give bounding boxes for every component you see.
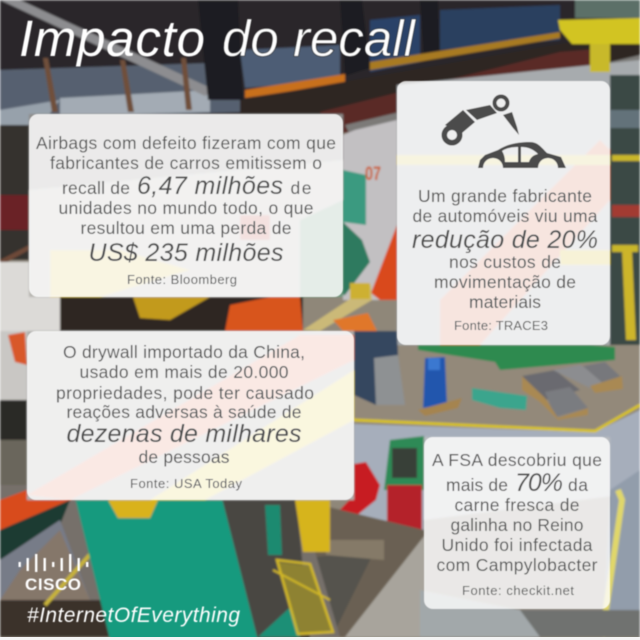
text: FSA description: Unido foi infectada [442, 535, 593, 555]
lower-left [0, 470, 340, 637]
text: airbags description: 6,47 milhões [137, 172, 283, 200]
centre floor and bed [300, 500, 424, 637]
orange machines [60, 297, 303, 331]
yellow crane [558, 18, 640, 44]
panel: drywall [27, 331, 354, 500]
source: checkit.net: Fonte: checkit.net [462, 583, 574, 598]
text: airbags description: recall de [62, 178, 130, 198]
right wall and machinery [397, 60, 640, 345]
source: TRACE3: Fonte: TRACE3 [454, 318, 548, 333]
floor markings [354, 405, 640, 431]
text: FSA description: 70% [515, 469, 563, 497]
text: materials handling: movimentação de [434, 272, 576, 292]
text: airbags description: fabricantes de carros emitissem o [50, 153, 322, 173]
text: materials handling: nos custos de [449, 252, 561, 272]
icon: robot arm [442, 94, 519, 146]
carts [384, 436, 424, 490]
ceiling and back walls [0, 0, 640, 130]
text: FSA description: mais de [446, 475, 508, 495]
panel: automaker [397, 81, 610, 345]
big teal press [75, 498, 258, 640]
text: FSA description: com Campylobacter [436, 555, 598, 575]
logo: Cisco [18, 554, 88, 594]
text: airbags description: resultou em uma perda de [80, 218, 292, 238]
text: materials handling: Um grande fabricante [418, 186, 592, 206]
hashtag: #InternetOfEverything [27, 604, 240, 627]
title: Impacto [19, 10, 205, 67]
logo: Cisco: CISCO [25, 575, 81, 594]
icon: car body [478, 142, 566, 168]
text: drywall description: reações adversas à saúde de [66, 402, 302, 422]
source: Bloomberg: Fonte: Bloomberg [127, 272, 237, 287]
wall with bay number 07 [343, 120, 397, 300]
text: airbags description [36, 133, 336, 267]
text: materials handling: materiais [469, 292, 541, 312]
left wall and railings [0, 125, 29, 260]
text: airbags description: US$ 235 milhões [88, 239, 284, 267]
text: airbags description: de [290, 178, 312, 198]
pallets [522, 370, 580, 400]
text: drywall description: usado em mais de 20.000 [80, 362, 289, 382]
title: do recall [222, 10, 417, 67]
text: FSA description [432, 450, 602, 575]
text: FSA description: A FSA descobriu que [432, 450, 602, 470]
floor with machines [354, 345, 640, 430]
text: FSA description: carne fresca de [454, 495, 580, 515]
left objects under panel 3 [0, 331, 27, 401]
panel: FSA [424, 437, 610, 609]
text: drywall description: O drywall importado da China, [63, 342, 305, 362]
under panel 2 tints [440, 140, 610, 345]
source: USA Today: Fonte: USA Today [130, 476, 242, 491]
text: materials handling: de automóveis viu uma [412, 206, 598, 226]
text: FSA description: galinha no Reino [450, 515, 584, 535]
background: factory floor photograph: 07 [365, 164, 381, 185]
text: drywall description [56, 342, 314, 467]
text: materials handling [412, 186, 598, 312]
text: drywall description: de pessoas [138, 447, 230, 467]
title [19, 10, 417, 67]
light backdrop seen through panel 3 [27, 331, 354, 500]
text: drywall description: propriedades, pode ter causado [56, 383, 314, 403]
panel: airbags [29, 114, 343, 297]
light backdrop seen through panel 1 [29, 114, 343, 297]
bottom white strip [0, 637, 640, 640]
text: materials handling: redução de 20% [412, 226, 598, 254]
text: airbags description: Airbags com defeito fizeram com que [36, 133, 336, 153]
text: drywall description: dezenas de milhares [66, 420, 302, 448]
text: airbags description: unidades no mundo todo, o que [58, 198, 314, 218]
text: FSA description: da [568, 475, 588, 495]
